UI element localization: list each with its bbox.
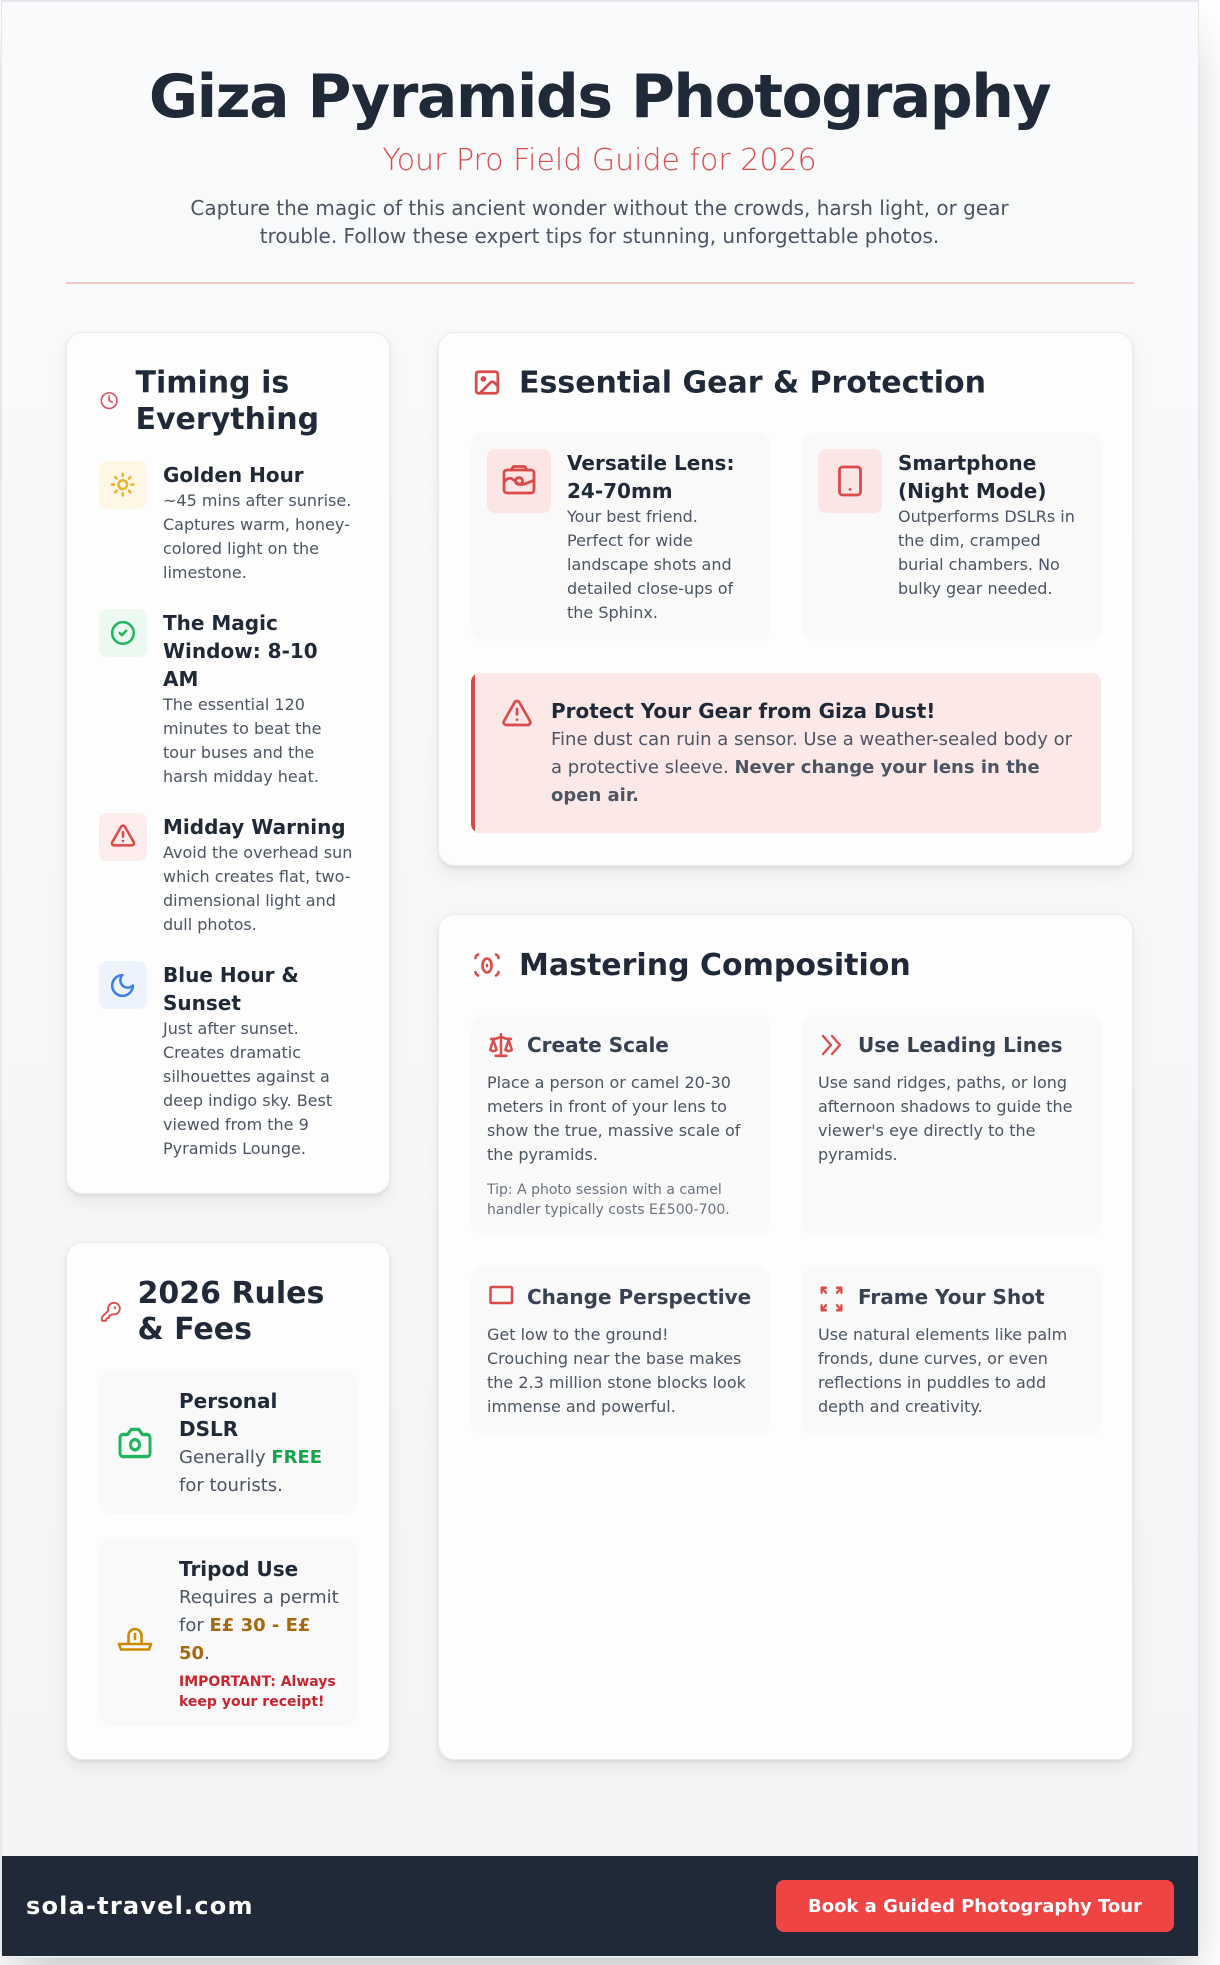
- callout: dust warning: Never change your lens in the: [734, 757, 1040, 778]
- card: smartphone: Outperforms DSLRs in: [898, 507, 1075, 526]
- item: golden hour: Golden Hour: [163, 463, 304, 487]
- footer: [2, 1856, 1198, 1956]
- item: magic window: minutes to beat the: [163, 719, 321, 738]
- card: lens: 24-70mm: [567, 479, 673, 503]
- card: tripod use: Tripod Use: [179, 1557, 298, 1581]
- card: personal dslr: [99, 1371, 357, 1514]
- item: midday warning: Avoid the overhead sun: [163, 843, 352, 862]
- card: frame your shot: depth and creativity.: [818, 1397, 983, 1416]
- card: smartphone: (Night Mode): [898, 479, 1046, 503]
- callout: dust warning: Protect Your Gear from Giza Dust!: [551, 699, 935, 723]
- card: personal dslr: Generally: [179, 1447, 271, 1468]
- panel: composition: [438, 914, 1132, 1760]
- brand: sola-travel.com: [26, 1892, 254, 1920]
- item: midday warning: dimensional light and: [163, 891, 336, 910]
- card: create scale: show the true, massive scale of: [487, 1121, 741, 1140]
- card: smartphone: burial chambers. No: [898, 555, 1060, 574]
- item: magic window: harsh midday heat.: [163, 767, 319, 786]
- item: blue hour: [99, 961, 332, 1158]
- panel: rules and fees: [66, 1242, 390, 1760]
- panel: essential gear: [438, 332, 1132, 866]
- card: smartphone: Smartphone: [898, 451, 1036, 475]
- card: change perspective: Change Perspective: [527, 1285, 751, 1309]
- card: create scale: Create Scale: [527, 1033, 669, 1057]
- card: create scale: Place a person or camel 20-30: [487, 1073, 731, 1092]
- card: lens: the Sphinx.: [567, 603, 658, 622]
- card: personal dslr: Personal: [179, 1389, 277, 1413]
- panel: timing: [66, 332, 390, 1194]
- card: lens: Your best friend.: [566, 507, 698, 526]
- button: book tour: Book a Guided Photography Tour: [808, 1896, 1142, 1917]
- item: golden hour: limestone.: [163, 563, 247, 582]
- item: midday warning: dull photos.: [163, 915, 257, 934]
- card: tripod use: Requires a permit: [179, 1587, 339, 1608]
- card: tripod use: IMPORTANT: Always: [179, 1674, 336, 1690]
- card: frame your shot: fronds, dune curves, or even: [818, 1349, 1048, 1368]
- item: blue hour: Creates dramatic: [163, 1043, 301, 1062]
- card: lens: Perfect for wide: [567, 531, 693, 550]
- card: leading lines: viewer's eye directly to the: [818, 1121, 1035, 1140]
- title: Giza Pyramids Photography: [149, 62, 1051, 132]
- card: create scale: handler typically costs E£500-700.: [487, 1202, 730, 1218]
- heading: timing: Timing is: [136, 366, 289, 400]
- subtitle: Your Pro Field Guide for 2026: [382, 143, 817, 178]
- item: magic window: AM: [163, 667, 198, 691]
- card: change perspective: Get low to the ground!: [487, 1325, 669, 1344]
- icon: clock: [101, 393, 117, 408]
- icon: focus: [476, 954, 498, 976]
- card: frame your shot: Use natural elements like palm: [818, 1325, 1067, 1344]
- card: lens: Versatile Lens:: [567, 451, 734, 475]
- heading: timing: Everything: [136, 402, 319, 437]
- card: smartphone: the dim, cramped: [898, 531, 1041, 550]
- heading: rules: 2026 Rules: [138, 1276, 324, 1311]
- card: personal dslr: DSLR: [179, 1417, 238, 1441]
- card: leading lines: Use Leading Lines: [858, 1033, 1062, 1057]
- item: magic window: Window: 8-10: [163, 639, 318, 663]
- item: blue hour: deep indigo sky. Best: [163, 1091, 332, 1110]
- card: create scale: [471, 1015, 770, 1235]
- callout: dust warning: Fine dust can ruin a sensor. Use a weather-sealed body or: [551, 729, 1073, 750]
- item: blue hour: silhouettes against a: [163, 1067, 330, 1086]
- item: blue hour: Sunset: [163, 991, 241, 1015]
- item: magic window: The Magic: [163, 611, 278, 635]
- card: change perspective: [471, 1267, 770, 1435]
- header: [149, 62, 1051, 248]
- intro text: trouble. Follow these expert tips for stunning, unforgettable photos.: [260, 224, 939, 248]
- heading: gear: Essential Gear & Protection: [519, 366, 986, 400]
- card: tripod use: 50: [179, 1643, 204, 1664]
- card: lens: [471, 433, 770, 641]
- item: golden hour: [99, 461, 351, 582]
- card: smartphone: bulky gear needed.: [898, 579, 1053, 598]
- item: midday warning: which creates flat, two-: [163, 867, 350, 886]
- item: magic window: The essential 120: [162, 695, 305, 714]
- card: personal dslr: FREE: [271, 1447, 322, 1468]
- card: leading lines: Use sand ridges, paths, or long: [818, 1073, 1067, 1092]
- card: frame your shot: reflections in puddles to add: [818, 1373, 1046, 1392]
- card: change perspective: the 2.3 million stone blocks look: [487, 1373, 747, 1392]
- card: frame your shot: [802, 1267, 1101, 1435]
- item: midday warning: [99, 813, 352, 934]
- card: tripod use: .: [204, 1643, 210, 1664]
- card: lens: landscape shots and: [567, 555, 732, 574]
- card: create scale: Tip: A photo session with a camel: [486, 1182, 722, 1198]
- heading: rules: & Fees: [138, 1312, 252, 1347]
- item: golden hour: colored light on the: [163, 539, 319, 558]
- item: midday warning: Midday Warning: [163, 815, 346, 839]
- item: golden hour: ~45 mins after sunrise.: [163, 491, 351, 510]
- item: blue hour: Blue Hour &: [163, 963, 299, 987]
- callout: dust warning: open air.: [551, 785, 639, 806]
- card: tripod use: for: [179, 1615, 209, 1636]
- card: tripod use: [99, 1539, 357, 1726]
- item: blue hour: Just after sunset.: [162, 1019, 299, 1038]
- card: create scale: meters in front of your lens to: [487, 1097, 727, 1116]
- item: golden hour: Captures warm, honey-: [163, 515, 350, 534]
- card: personal dslr: for tourists.: [179, 1475, 283, 1496]
- heading: composition: Mastering Composition: [519, 948, 911, 983]
- callout: dust warning: a protective sleeve.: [551, 757, 734, 778]
- button: book tour: [776, 1880, 1174, 1932]
- item: blue hour: Pyramids Lounge.: [163, 1139, 306, 1158]
- card: tripod use: keep your receipt!: [179, 1694, 324, 1710]
- callout: dust warning: [471, 673, 1101, 833]
- card: create scale: the pyramids.: [487, 1145, 598, 1164]
- card: leading lines: afternoon shadows to guide the: [818, 1097, 1072, 1116]
- item: magic window: tour buses and the: [163, 743, 314, 762]
- item: blue hour: viewed from the 9: [163, 1115, 309, 1134]
- intro text: Capture the magic of this ancient wonder without the crowds, harsh light, or gear: [190, 196, 1009, 220]
- card: change perspective: immense and powerful.: [487, 1397, 676, 1416]
- icon: image: [476, 372, 498, 393]
- card: smartphone: [802, 433, 1101, 641]
- item: magic window: [99, 609, 321, 786]
- card: tripod use: E£ 30 - E£: [209, 1615, 310, 1636]
- card: leading lines: [802, 1015, 1101, 1235]
- card: frame your shot: Frame Your Shot: [858, 1285, 1045, 1309]
- card: lens: detailed close-ups of: [567, 579, 734, 598]
- card: leading lines: pyramids.: [818, 1145, 898, 1164]
- card: change perspective: Crouching near the base makes: [487, 1349, 741, 1368]
- icon: key: [102, 1303, 120, 1321]
